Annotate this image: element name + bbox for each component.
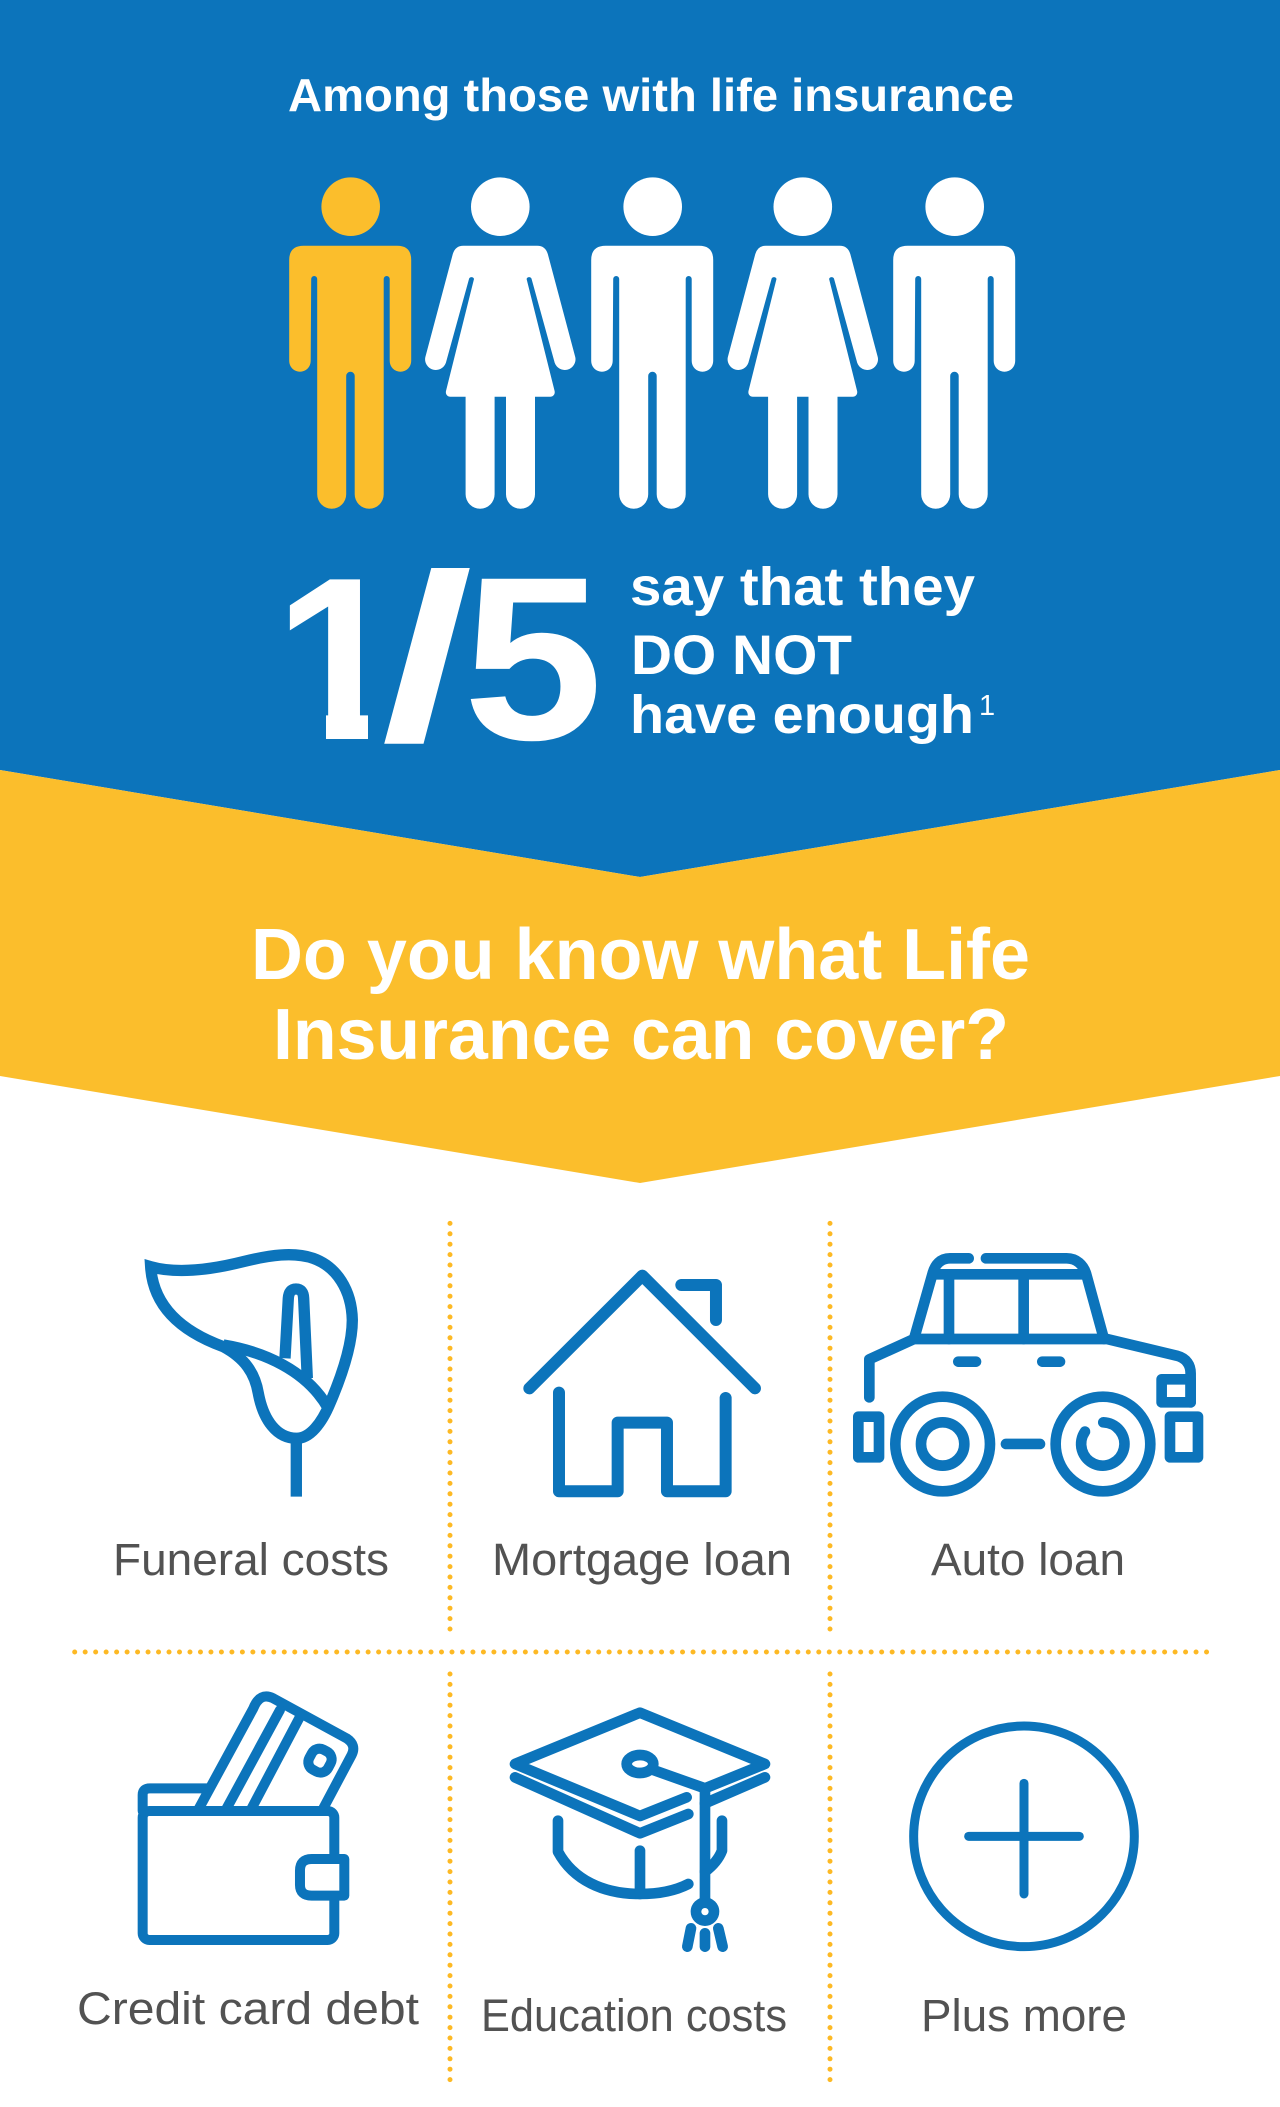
icon: white man — [893, 177, 1015, 509]
panel: yellow banner background — [0, 770, 1280, 1183]
banner heading: Insurance can cover? — [273, 995, 1009, 1075]
panel: blue header background — [0, 0, 1280, 877]
icon: white woman — [728, 177, 878, 509]
statistic text: 1 — [979, 690, 995, 722]
icon: yellow man — [289, 177, 411, 509]
big statistic: 1/5: / — [381, 526, 473, 790]
pictogram: five people — [289, 177, 1015, 509]
icon: funeral flower — [151, 1255, 352, 1497]
statistic text: DO NOT — [631, 623, 852, 686]
icon: car — [858, 1258, 1198, 1491]
label: credit card debt: Credit card debt — [77, 1983, 420, 2034]
label: funeral costs: Funeral costs — [113, 1534, 389, 1585]
big statistic: 1/5: 1 — [274, 530, 403, 789]
banner heading: Do you know what Life — [251, 915, 1030, 995]
banner heading — [251, 915, 1030, 1075]
big statistic: 1/5: 5 — [463, 529, 603, 789]
label: plus more: Plus more — [921, 1990, 1127, 2041]
icon: house — [529, 1276, 755, 1491]
statistic text: have enough — [630, 685, 974, 745]
label: mortgage loan: Mortgage loan — [492, 1534, 792, 1585]
label: auto loan: Auto loan — [931, 1534, 1125, 1585]
icon: white man — [591, 177, 713, 509]
icon: wallet and card — [143, 1696, 353, 1940]
heading: among those with life insurance: Among those with life insurance — [288, 69, 1014, 121]
icon: plus in circle — [914, 1726, 1134, 1947]
statistic text: say that they — [630, 557, 975, 617]
icon: graduation cap — [515, 1713, 765, 1947]
label: education costs: Education costs — [481, 1990, 787, 2041]
dotted grid dividers — [75, 1222, 1207, 2080]
big statistic: 1/5 — [290, 568, 596, 744]
statistic text — [630, 557, 995, 745]
icon: white woman — [425, 177, 576, 509]
